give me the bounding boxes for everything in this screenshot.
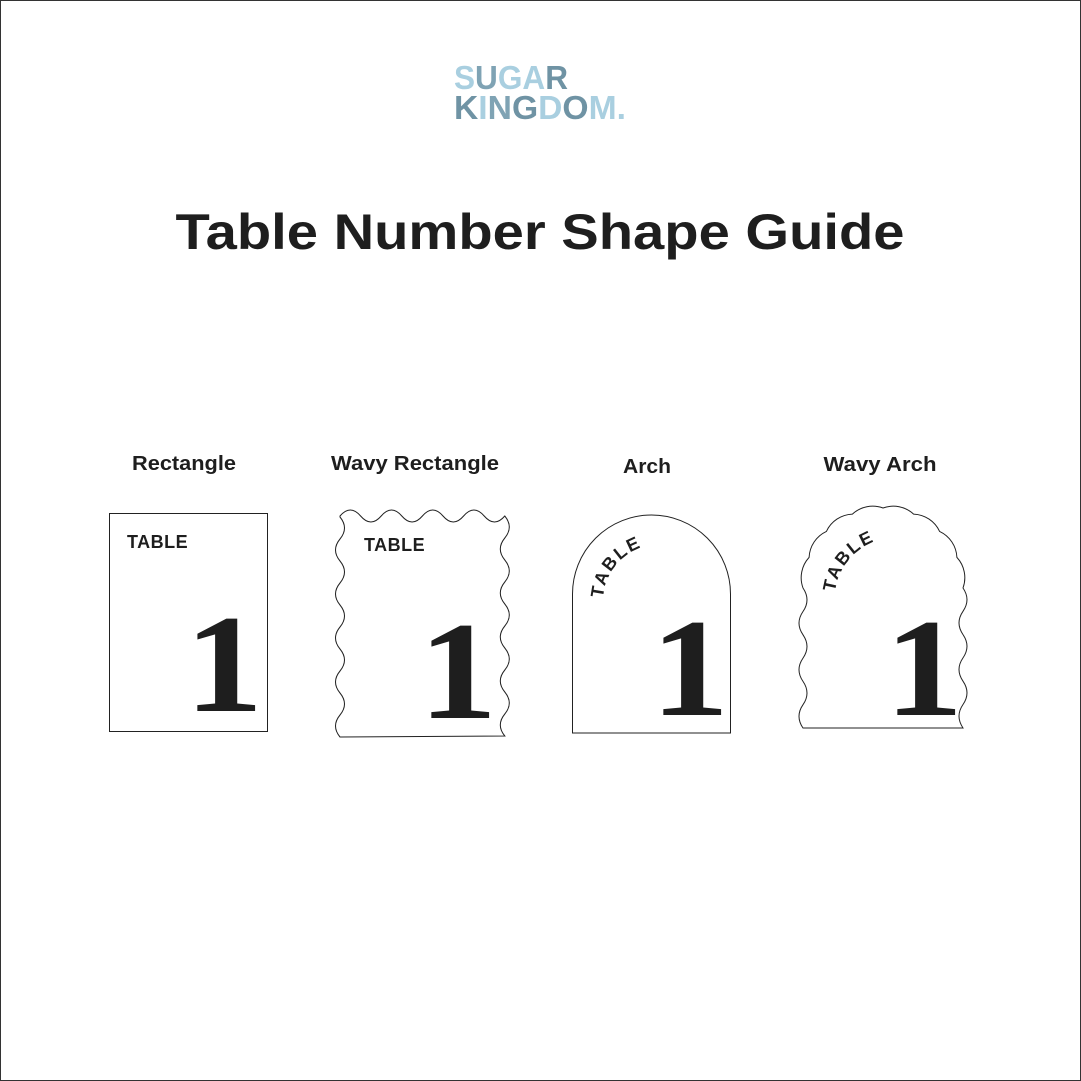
shape: wavy arch — [798, 506, 968, 746]
logo: KINGDOM. — [454, 89, 626, 126]
shape: wavy rectangle — [336, 510, 509, 749]
shape: arch: TABLE — [590, 536, 640, 596]
shape: rectangle: TABLE — [127, 532, 188, 552]
shape: wavy arch: TABLE — [822, 530, 874, 590]
shape: wavy arch: 1 — [885, 592, 963, 746]
logo — [454, 59, 626, 126]
title: Table Number Shape Guide — [176, 204, 904, 260]
shape: wavy rectangle: TABLE — [364, 535, 425, 555]
shape labels: Rectangle — [132, 453, 236, 475]
shape: arch — [572, 514, 731, 746]
shape labels: Wavy Arch — [824, 454, 936, 476]
shape labels — [132, 453, 936, 478]
shape: wavy rectangle: 1 — [419, 595, 497, 749]
shape: rectangle — [110, 514, 268, 742]
shape: rectangle: 1 — [185, 588, 263, 742]
logo: SUGAR — [454, 59, 568, 96]
shape: arch: 1 — [651, 592, 729, 746]
shape labels: Wavy Rectangle — [331, 453, 499, 475]
shape labels: Arch — [623, 456, 671, 478]
